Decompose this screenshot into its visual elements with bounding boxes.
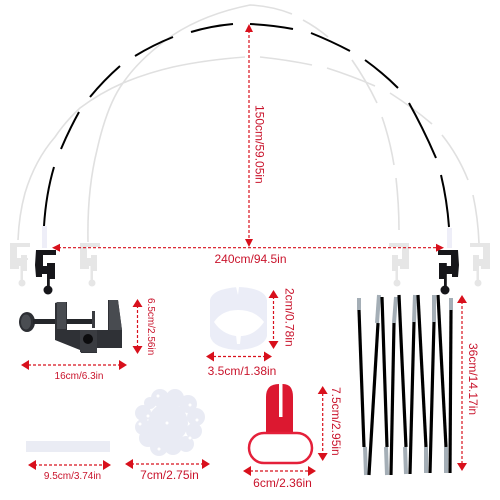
- red balloon tying tool photo: [249, 384, 312, 463]
- faded clamps: [10, 243, 490, 286]
- balloon clip ring photo: [210, 287, 267, 350]
- clamp width dimension: 16cm/6.3in: [55, 371, 103, 382]
- width dimension: arch: 240cm/94.5in: [214, 252, 287, 266]
- flower balloon clip photo: [135, 389, 205, 456]
- white end connector left: [42, 226, 47, 248]
- ring width dimension: [206, 352, 276, 378]
- stick width dimension: 9.5cm/3.74in: [44, 471, 101, 482]
- clamp product photo: [19, 300, 122, 353]
- clamp height dimension: 6.5cm/2.56in: [145, 298, 156, 355]
- flower width dimension: 7cm/2.75in: [140, 468, 199, 482]
- main arch: black and white pole segments: [44, 24, 449, 227]
- clamp width dimension: [21, 360, 127, 382]
- tool height dimension: 7.5cm/2.95in: [329, 387, 343, 456]
- height dimension: arch: 150cm/59.05in: [252, 105, 266, 184]
- tool width dimension: 6cm/2.36in: [253, 476, 312, 490]
- stick width dimension: [28, 460, 111, 482]
- right table clamp: [438, 250, 459, 294]
- white end connector right: [447, 228, 452, 248]
- left table clamp: [35, 250, 56, 294]
- ring height dimension: 2cm/0.78in: [282, 288, 296, 347]
- width dimension: arch: [52, 244, 444, 266]
- clamp height dimension: [132, 298, 156, 355]
- flower width dimension: [125, 459, 210, 482]
- white connector stick photo: [26, 441, 110, 452]
- height dimension: arch: [245, 24, 266, 247]
- ring height dimension: [268, 288, 296, 349]
- pole length dimension: [457, 295, 480, 471]
- tool height dimension: [318, 386, 343, 461]
- pole length dimension: 36cm/14.17in: [466, 343, 480, 415]
- background arc: wide faded frame: [18, 57, 479, 243]
- folded black tent poles: [359, 295, 451, 475]
- ring width dimension: 3.5cm/1.38in: [208, 364, 276, 378]
- background arc: narrow faded frame: [88, 5, 399, 242]
- tool width dimension: [243, 466, 316, 490]
